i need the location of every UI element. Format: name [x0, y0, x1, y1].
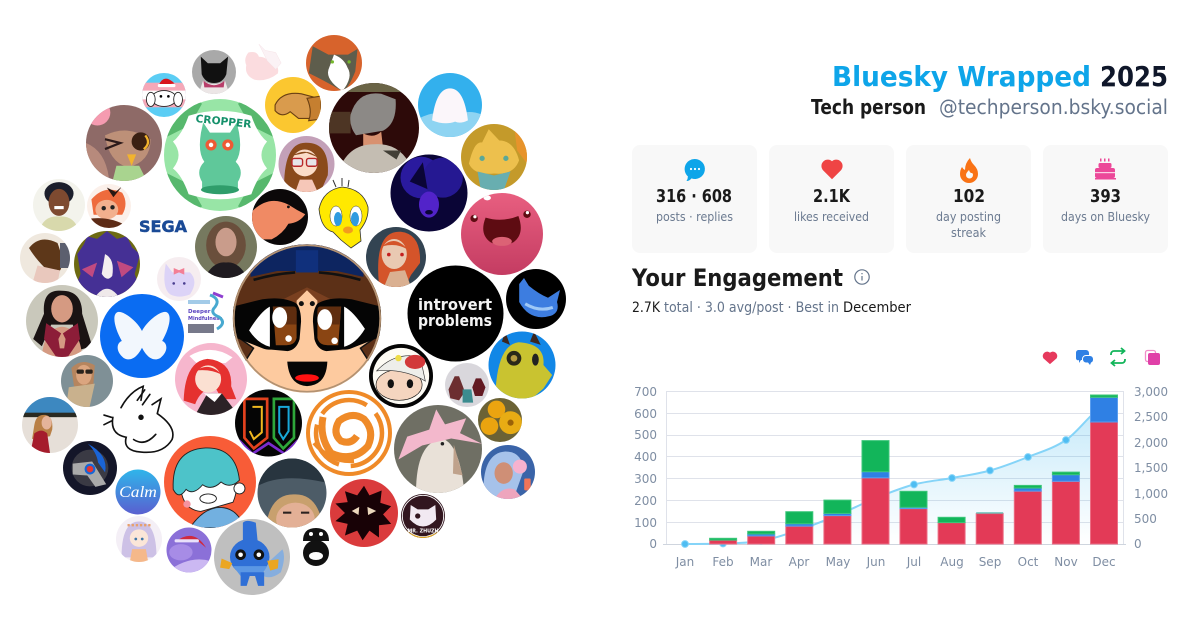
- avatar: purple neon doll: [390, 154, 468, 232]
- avatar: pastel girl with phone: [481, 445, 535, 499]
- avatar: sunflowers: [478, 398, 522, 442]
- avatar: Deeper Mindfulness flyer: Deeper: [188, 309, 211, 315]
- icon: heart: [822, 160, 842, 178]
- avatar: ghost on blue: [418, 73, 482, 137]
- avatar: Calm logo: Calm: [119, 483, 157, 501]
- avatar: line-drawn rabbit: [104, 386, 173, 452]
- avatar: long brown hair from behind: [20, 233, 70, 283]
- left axis labels: 500: [634, 428, 657, 442]
- avatar: Tweety: [319, 178, 368, 248]
- avatar: purple santa cat: [166, 528, 212, 572]
- icon: flame: [960, 158, 978, 183]
- stat value: 102: [953, 186, 985, 207]
- avatar: introvert problems: introvert: [418, 295, 492, 314]
- panel: posts and replies stat: [632, 145, 757, 253]
- avatar: smiling man: [33, 179, 85, 231]
- panel: posting streak stat: [906, 145, 1031, 253]
- avatar: Mr. Zhuzh badge: MR. ZHUZH: [407, 529, 439, 535]
- avatar: lavender fairy: [116, 516, 162, 562]
- month labels: May: [826, 555, 850, 569]
- avatar: central cartoon face with glasses: [233, 243, 381, 393]
- avatar: yellow with brown puppy: [265, 77, 321, 133]
- stat label: streak: [951, 226, 986, 240]
- month labels: Dec: [1092, 555, 1116, 569]
- left axis labels: [634, 385, 657, 551]
- avatar: introvert problems: [408, 266, 504, 362]
- stat label: days on Bluesky: [1061, 210, 1150, 224]
- heading: Bluesky Wrapped 2025: Bluesky Wrapped: [832, 60, 1091, 93]
- cumulative area and line: [682, 403, 1107, 547]
- avatar: red hair maid: [175, 343, 247, 415]
- avatar: grey and white cat: [306, 35, 362, 91]
- text: engagement summary: total · 3.0 avg/post · Best in: [664, 300, 839, 316]
- month labels: Oct: [1018, 555, 1039, 569]
- text: engagement summary: 2.7K: [632, 300, 661, 316]
- avatar: yellow character on mustard: [461, 124, 527, 190]
- avatar: Cropper monster: [164, 99, 276, 211]
- avatar: girl with red glasses: [278, 136, 334, 192]
- month labels: Feb: [712, 555, 734, 569]
- avatar: 3D figure with grey beanie: [329, 83, 419, 173]
- month labels: Mar: [750, 555, 772, 569]
- avatar: red sun eye: [330, 479, 398, 547]
- avatar: pink slime: [461, 193, 543, 275]
- avatar: ceramic vases: [445, 363, 489, 407]
- avatar: black mushroom: [303, 528, 329, 566]
- panel: avatar bubble cluster: [20, 35, 566, 595]
- avatar: black cat: [192, 50, 236, 94]
- left axis labels: 400: [634, 450, 657, 464]
- month labels: Sep: [979, 555, 1001, 569]
- chart: monthly engagement combo chart: [634, 385, 1168, 569]
- avatar: capybara: [252, 189, 308, 245]
- right axis labels: 2,000: [1134, 436, 1168, 450]
- month labels: Jun: [866, 555, 885, 569]
- right axis labels: 500: [1134, 512, 1157, 526]
- legend icons: [1043, 348, 1160, 366]
- avatar: woman with sunglasses: [61, 355, 113, 407]
- stat value: 393: [1090, 186, 1121, 207]
- icon: chat bubble: [685, 159, 705, 181]
- subheading: name and handle: @techperson.bsky.social: [939, 95, 1168, 119]
- right axis labels: 1,500: [1134, 461, 1168, 475]
- icon: replies chat: [1076, 350, 1093, 365]
- heading: Bluesky Wrapped 2025: 2025: [1100, 60, 1168, 93]
- avatar: orange spiral: [308, 392, 390, 474]
- icon: cake: [1095, 158, 1116, 180]
- month labels: Nov: [1054, 555, 1078, 569]
- avatar: Mudkip: [214, 519, 290, 595]
- icon: quotes copy: [1146, 350, 1160, 365]
- avatar: Cropper monster: CROPPER: [195, 112, 252, 131]
- avatar: yellow animatronic: [488, 332, 556, 398]
- subheading: name and handle: [811, 95, 1168, 119]
- left axis labels: 300: [634, 472, 657, 486]
- avatar: rainbow JD emblem: [235, 390, 302, 456]
- logo: SEGA: SEGA: [139, 217, 188, 236]
- avatar: winking brown girl: [84, 100, 162, 181]
- right axis labels: 0: [1134, 537, 1142, 551]
- avatar: woman in snow: [22, 397, 78, 453]
- avatar: teal hair character: [164, 436, 256, 528]
- month labels: Jan: [675, 555, 694, 569]
- left axis labels: 100: [634, 516, 657, 530]
- right axis labels: 3,000: [1134, 385, 1168, 399]
- avatar: blue sea slug: [506, 269, 566, 329]
- avatar: orange hair character: [87, 184, 131, 228]
- heading: Your Engagement: Your Engagement: [631, 264, 843, 292]
- month labels: [675, 555, 1116, 569]
- avatar: trans flag bunny: [142, 73, 186, 117]
- avatar: introvert problems: problems: [418, 311, 492, 330]
- left axis labels: 200: [634, 494, 657, 508]
- avatar: red braid character: [366, 227, 426, 287]
- avatar: pale pink bear: [245, 44, 281, 80]
- stat value: 2.1K: [813, 186, 851, 207]
- avatar: Calm logo: [116, 470, 160, 514]
- avatar: Deeper Mindfulness flyer: Mindfulness: [188, 316, 222, 322]
- icon: reposts: [1111, 348, 1125, 366]
- avatar: Deeper Mindfulness flyer: [188, 293, 223, 333]
- stat label: [936, 210, 1001, 240]
- subheading: name and handle: Tech person: [811, 95, 926, 119]
- panel: likes stat: [769, 145, 894, 253]
- right axis labels: 1,000: [1134, 487, 1168, 501]
- stat label: likes received: [794, 210, 869, 224]
- icon: info: [855, 270, 869, 284]
- stacked bars: [710, 395, 1118, 544]
- left axis labels: 0: [649, 537, 657, 551]
- avatar: woman in red halter: [26, 285, 98, 357]
- right axis labels: [1134, 385, 1168, 551]
- stat label: day posting: [936, 210, 1001, 224]
- avatar: Bluesky butterfly: [100, 294, 184, 378]
- left axis labels: 600: [634, 407, 657, 421]
- avatar: rabbit with flower hat: [394, 405, 482, 493]
- stat label: posts · replies: [656, 210, 733, 224]
- left axis labels: 700: [634, 385, 657, 399]
- month labels: Aug: [940, 555, 964, 569]
- avatar: dark wheel logo: [63, 441, 117, 495]
- icon: likes heart: [1043, 352, 1057, 364]
- avatar: curly hair woman: [195, 216, 257, 278]
- panel: days on Bluesky stat: [1043, 145, 1168, 253]
- text: engagement summary: December: [843, 300, 911, 316]
- month labels: Apr: [789, 555, 809, 569]
- avatar: purple spiky hair: [74, 231, 140, 297]
- avatar: flower crown otter: [369, 344, 433, 408]
- text: engagement summary: [632, 300, 911, 316]
- avatar: Mr. Zhuzh badge: [401, 494, 445, 538]
- right axis labels: 2,500: [1134, 410, 1168, 424]
- avatar: selfie: [258, 458, 326, 528]
- month labels: Jul: [906, 555, 921, 569]
- avatar: lilac bunny: [157, 257, 201, 301]
- stat value: 316 · 608: [656, 186, 732, 207]
